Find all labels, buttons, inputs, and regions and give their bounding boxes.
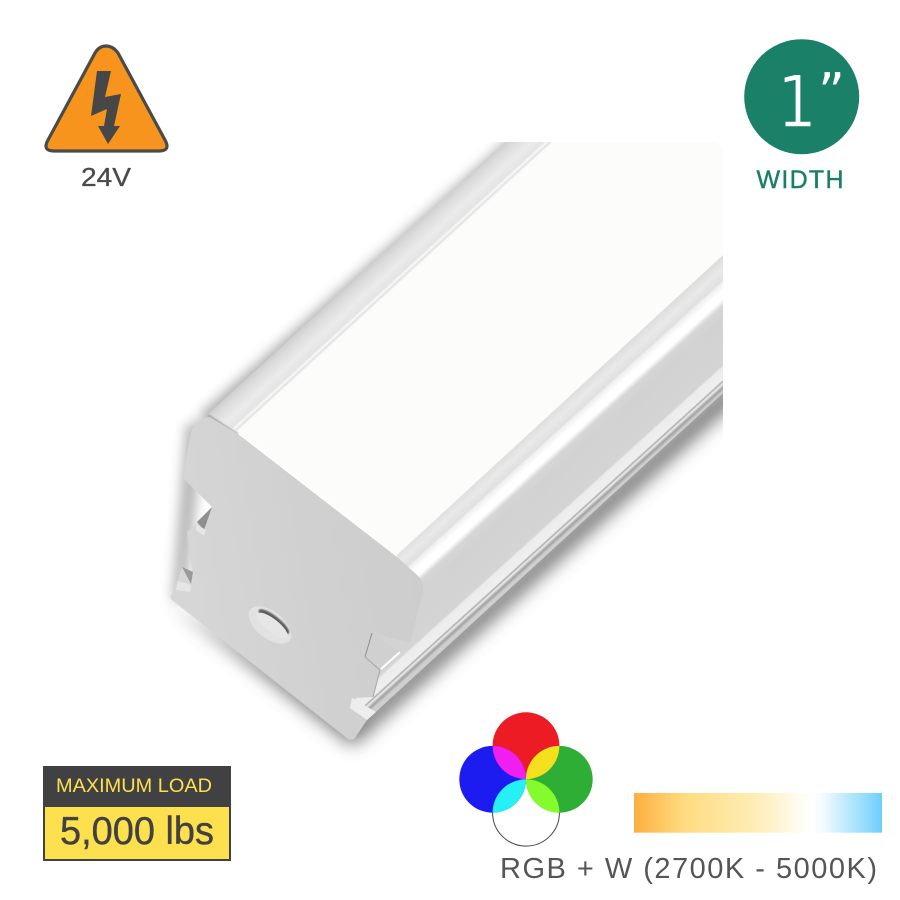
cable hole: [242, 599, 298, 651]
colour temperature gradient bar: [634, 793, 882, 833]
load value: 5,000 lbs: [60, 810, 214, 853]
voltage label: 24V: [81, 162, 132, 192]
product: aluminum LED channel: [170, 138, 740, 746]
colour options label: RGB + W (2700K - 5000K): [500, 853, 877, 885]
right notch detail: [365, 633, 400, 670]
product shadow: [172, 138, 740, 746]
left notch details: [197, 507, 212, 530]
inch mark: ”: [818, 63, 845, 123]
right rail and side wall: [348, 255, 723, 738]
width value: 1: [777, 60, 817, 144]
left rail: [207, 142, 555, 432]
maximum load badge: [43, 766, 231, 861]
white diffuser panel: [238, 142, 723, 555]
end cap: [170, 417, 423, 740]
icon: voltage warning triangle: [46, 46, 167, 151]
shaded seam under cap: [208, 415, 238, 434]
width label: WIDTH: [756, 166, 844, 194]
load heading: MAXIMUM LOAD: [56, 776, 212, 797]
width badge: [744, 39, 859, 154]
icon: lightning bolt: [91, 71, 121, 144]
icon: RGBW colour circles: [459, 712, 593, 846]
